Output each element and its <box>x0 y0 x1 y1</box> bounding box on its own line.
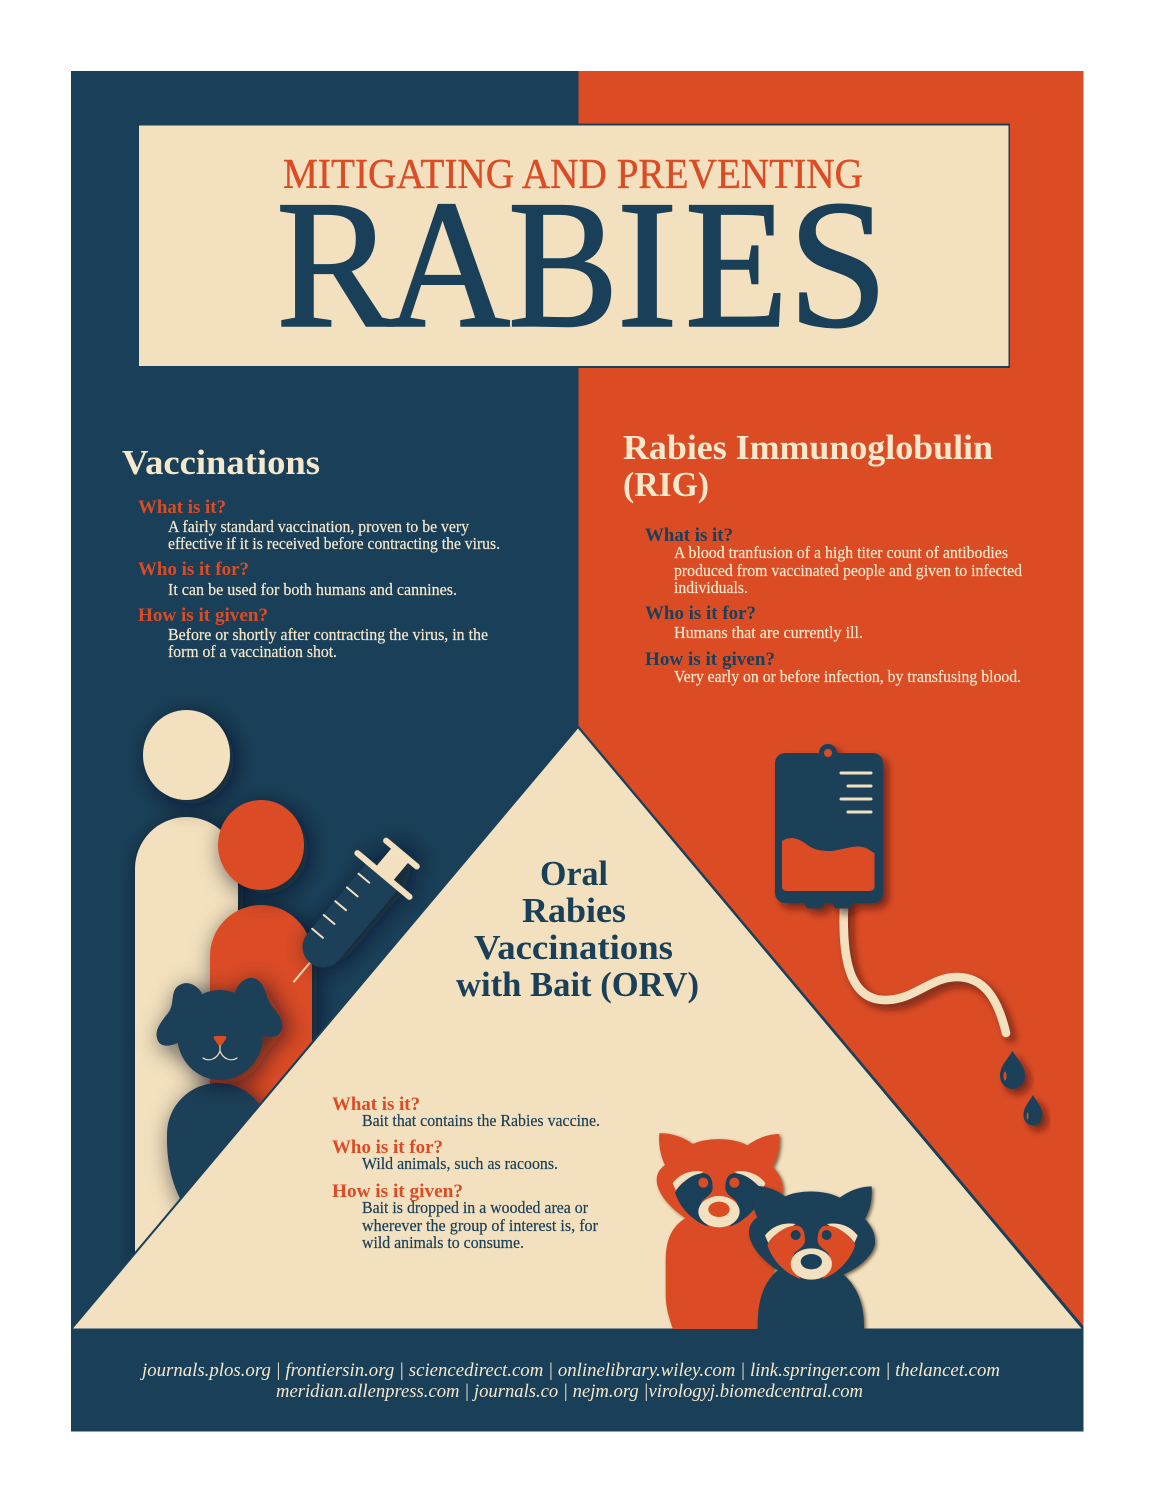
text block: who is it for: Who is it for? <box>332 1138 443 1158</box>
text block: who is it for <box>645 604 863 642</box>
text block: how is it given: Very early on or before infection, by transfusing blood. <box>674 667 1021 686</box>
icon: syringe body <box>281 827 432 986</box>
text block: who is it for <box>138 560 457 599</box>
icon: bag hook hole <box>824 749 832 757</box>
panel: title banner <box>139 124 1010 368</box>
text block: what is it: effective if it is received before contracting the virus. <box>168 534 500 553</box>
text block: what is it: What is it? <box>138 498 226 518</box>
heading: vaccinations: Vaccinations <box>122 444 320 482</box>
text block: how is it given: wild animals to consume. <box>362 1233 524 1252</box>
icon: tube <box>844 905 1006 1033</box>
text block: what is it <box>332 1095 600 1130</box>
panel: footer sources <box>71 1329 1084 1432</box>
text block: how is it given: wherever the group of interest is, for <box>362 1216 598 1235</box>
text block: sources line 2: meridian.allenpress.com | journals.co | nejm.org |virologyj.biomedcentral.com <box>276 1381 863 1402</box>
title: RABIES: B <box>508 163 618 366</box>
panel: navy background <box>71 71 578 1432</box>
icon: person and dog receiving vaccination <box>135 710 432 1300</box>
text block: what is it: Bait that contains the Rabies vaccine. <box>362 1111 600 1130</box>
text block: what is it: produced from vaccinated people and given to infected <box>674 561 1022 580</box>
heading: oral rabies vaccinations with bait: Vaccinations <box>474 929 673 967</box>
text block: what is it: A fairly standard vaccination, proven to be very <box>168 517 469 536</box>
text block: who is it for <box>332 1138 558 1173</box>
text block: how is it given: form of a vaccination shot. <box>168 642 337 661</box>
icon: adult head <box>143 710 230 800</box>
heading: oral rabies vaccinations with bait: Rabies <box>522 892 626 930</box>
icon: raccoons <box>657 1133 875 1330</box>
panel: ORV text <box>332 855 699 1252</box>
text block: how is it given: Bait is dropped in a wooded area or <box>362 1198 588 1217</box>
icon: dog mouth <box>203 1046 237 1060</box>
text block: how is it given <box>645 650 1021 686</box>
text block: what is it: individuals. <box>674 578 748 597</box>
icon: dog nose <box>214 1036 226 1046</box>
icon: adult body <box>135 817 238 1300</box>
icon: blood bag with tube <box>775 744 1042 1126</box>
text block: what is it: What is it? <box>332 1095 420 1115</box>
text block: how is it given <box>138 606 488 661</box>
icon: dog head <box>157 978 282 1080</box>
text block: who is it for: Wild animals, such as racoons. <box>362 1154 558 1173</box>
text block: what is it <box>138 498 500 553</box>
icon: syringe marks <box>312 874 369 938</box>
title: RABIES: S <box>788 163 888 366</box>
title: RABIES <box>276 163 888 366</box>
text block: how is it given <box>332 1182 598 1252</box>
panel: orange background <box>578 71 1084 1432</box>
text block: how is it given: How is it given? <box>138 606 268 626</box>
text block: who is it for: It can be used for both humans and cannines. <box>168 580 457 599</box>
title: RABIES: E <box>685 163 788 366</box>
heading: oral rabies vaccinations with bait <box>456 855 699 1004</box>
heading: rabies immunoglobulin: (RIG) <box>623 466 709 504</box>
icon: orange raccoon <box>657 1133 783 1330</box>
text block: how is it given: How is it given? <box>645 650 775 670</box>
title: subtitle: MITIGATING AND PREVENTING <box>283 152 863 198</box>
icon: syringe <box>265 827 432 1006</box>
panel: vaccinations text <box>122 444 500 661</box>
text block: what is it: A blood tranfusion of a high titer count of antibodies <box>674 543 1008 562</box>
title: RABIES: A <box>385 163 510 366</box>
text block: who is it for: Who is it for? <box>645 604 756 624</box>
icon: small blood drop <box>1024 1095 1042 1126</box>
icon: dog body <box>167 1083 269 1240</box>
text block: how is it given: How is it given? <box>332 1182 463 1202</box>
icon: measurement lines <box>841 773 871 812</box>
icon: syringe needle <box>293 933 335 982</box>
heading: rabies immunoglobulin <box>623 429 993 504</box>
icon: blood level <box>782 838 874 891</box>
text block: who is it for: Humans that are currently ill. <box>674 623 863 642</box>
icon: large blood drop <box>1000 1051 1025 1089</box>
text block: how is it given: Before or shortly after contracting the virus, in the <box>168 625 488 644</box>
panel: RIG text <box>623 429 1022 686</box>
heading: rabies immunoglobulin: Rabies Immunoglobulin <box>623 429 993 467</box>
heading: oral rabies vaccinations with bait: with Bait (ORV) <box>456 966 699 1004</box>
heading: oral rabies vaccinations with bait: Oral <box>540 855 608 893</box>
text block: who is it for: Who is it for? <box>138 560 249 580</box>
icon: bag <box>775 744 883 908</box>
text block: what is it <box>645 526 1022 597</box>
panel: ORV triangle <box>70 725 1086 1329</box>
text block: what is it: What is it? <box>645 526 733 546</box>
icon: child body <box>210 905 312 1250</box>
text block: sources line 1: journals.plos.org | frontiersin.org | sciencedirect.com | onlinelibrary.wiley.com | link.springer.com | thelancet.com <box>139 1360 1000 1381</box>
title: RABIES: R <box>276 163 394 366</box>
icon: navy raccoon <box>749 1186 875 1329</box>
icon: child head <box>218 800 304 890</box>
title: RABIES: I <box>617 163 678 366</box>
